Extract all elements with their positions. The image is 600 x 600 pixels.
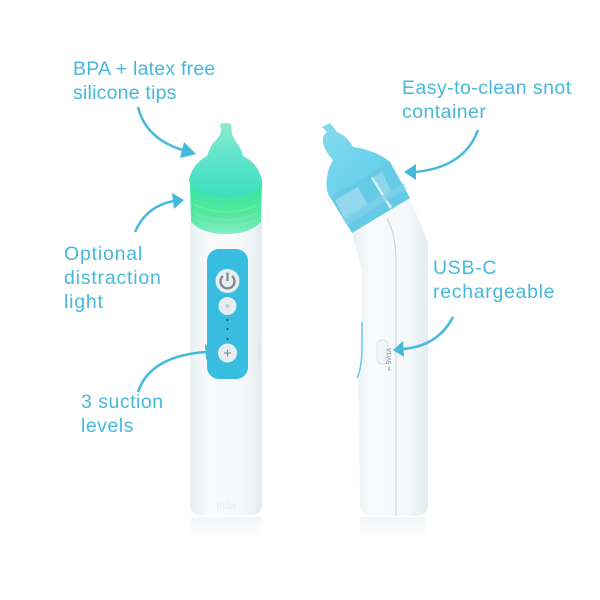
label: distraction light: Optional bbox=[64, 243, 143, 265]
silicone tip blue bbox=[322, 123, 390, 198]
label: BPA + latex free: BPA + latex free bbox=[73, 58, 215, 80]
arrow: distraction light bbox=[135, 193, 184, 232]
arrow: BPA tips bbox=[138, 107, 196, 158]
right device body bbox=[352, 198, 428, 516]
label: USB-C bbox=[433, 257, 555, 303]
usb label: ⇐ 5V/1A bbox=[387, 348, 393, 371]
arrow: suction levels bbox=[138, 344, 216, 392]
label: snot container: container bbox=[402, 101, 486, 123]
device: right aspirator bbox=[322, 123, 428, 543]
label: distraction light: distraction bbox=[64, 267, 162, 289]
label: BPA + latex free bbox=[73, 58, 215, 104]
arrow: USB-C bbox=[393, 317, 453, 357]
embossed logo: frida bbox=[216, 501, 236, 512]
label: distraction light: light bbox=[64, 291, 104, 313]
silicone tip bbox=[189, 123, 262, 198]
plus button bbox=[218, 344, 237, 362]
container highlights bbox=[335, 172, 406, 225]
level dots bbox=[226, 319, 228, 340]
label: USB-C: USB-C bbox=[433, 257, 497, 279]
reflection under left device bbox=[191, 517, 261, 543]
control panel bbox=[207, 249, 248, 379]
label: suction levels: 3 suction bbox=[81, 391, 164, 413]
arrow: snot container bbox=[404, 130, 478, 180]
body seam bbox=[387, 218, 396, 516]
label: snot container: Easy-to-clean snot bbox=[402, 77, 572, 99]
label: suction levels bbox=[81, 391, 164, 437]
left device body bbox=[190, 222, 262, 515]
label: USB-C: rechargeable bbox=[433, 281, 555, 303]
minus button bbox=[218, 297, 236, 315]
usb port cover bbox=[377, 340, 388, 364]
side button bbox=[258, 341, 261, 361]
collar ridges bbox=[194, 205, 258, 226]
transparent container bbox=[330, 162, 410, 233]
label: distraction light bbox=[64, 243, 162, 313]
label: suction levels: levels bbox=[81, 415, 134, 437]
reflection under right device bbox=[360, 517, 426, 543]
label: snot container bbox=[402, 77, 572, 123]
power button bbox=[216, 269, 240, 293]
device: left aspirator bbox=[189, 123, 262, 543]
blue side strip bbox=[357, 322, 362, 378]
green light collar bbox=[190, 182, 262, 234]
label: BPA + latex free: silicone tips bbox=[73, 82, 177, 104]
